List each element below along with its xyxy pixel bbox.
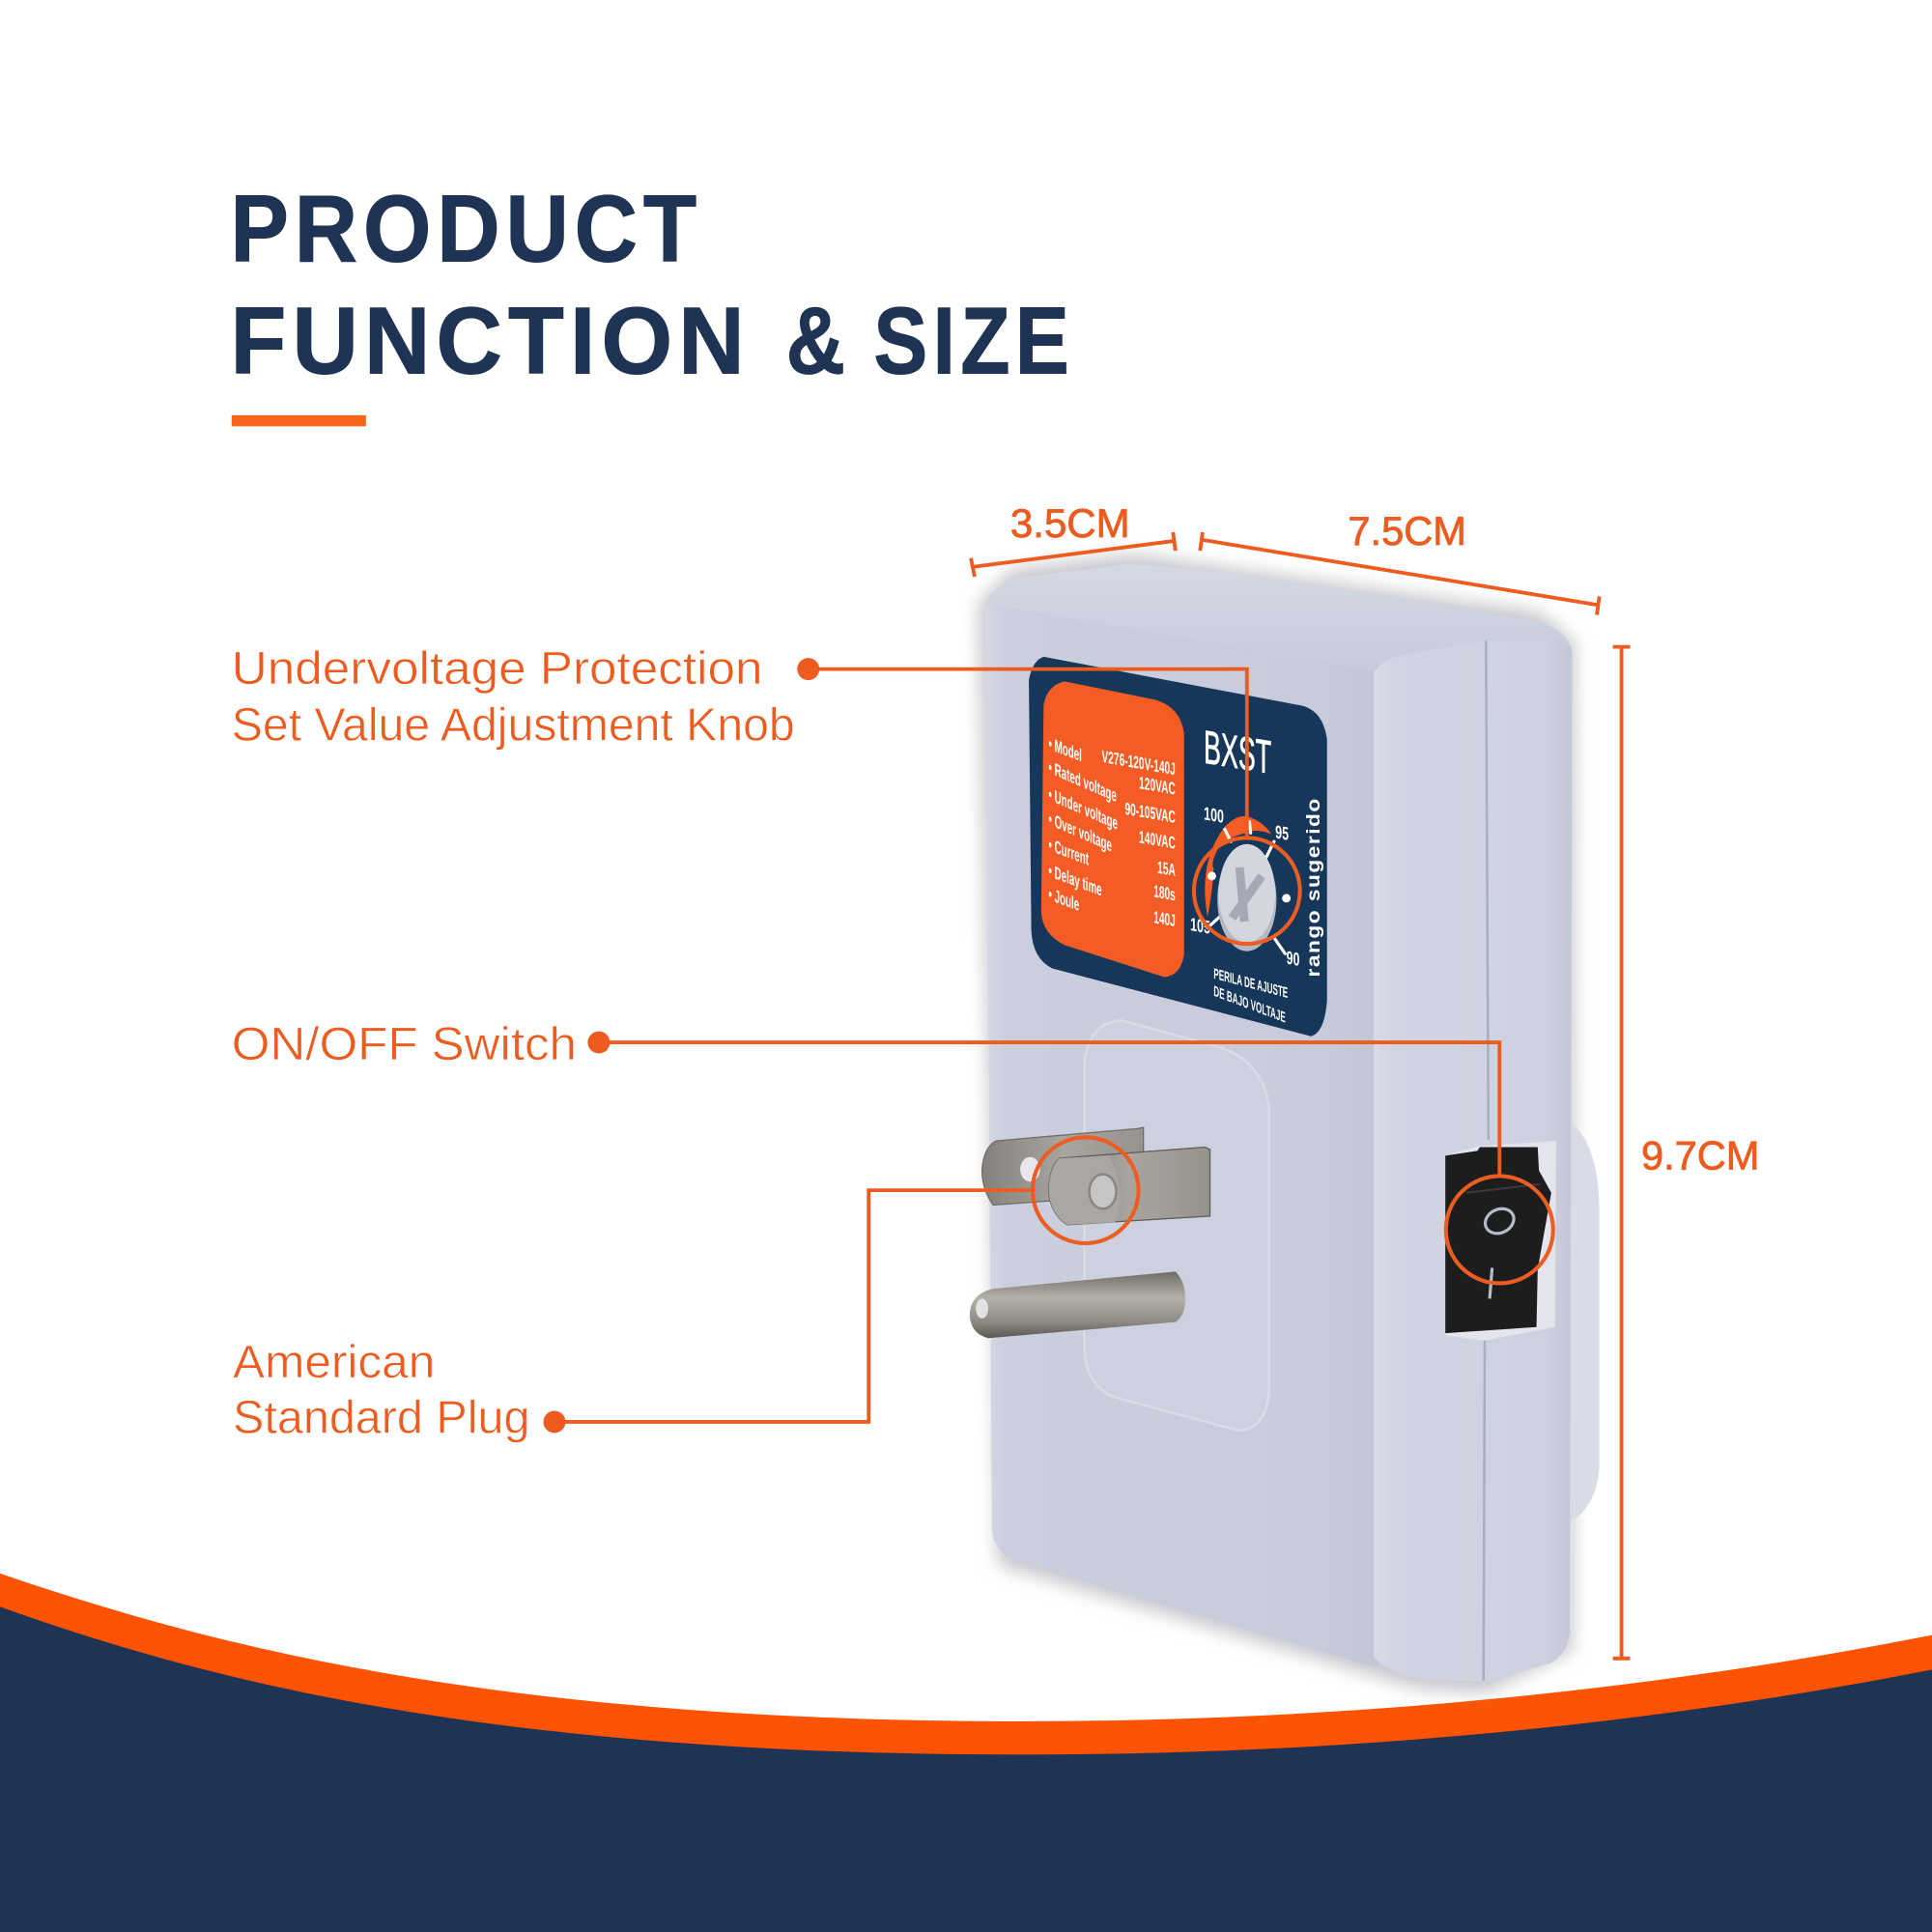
- spec list right: 180s: [1153, 883, 1176, 905]
- plug plate: [1084, 1020, 1269, 1431]
- dimension: 7.5CM: 7.5CM: [1348, 508, 1466, 554]
- rocker switch: [1445, 1148, 1551, 1333]
- dial numbers: 95: [1275, 822, 1289, 845]
- spec list right: V276-120V-140J: [1101, 748, 1176, 780]
- dial numbers: 100: [1204, 804, 1224, 828]
- label: navy panel: [1029, 657, 1327, 1037]
- front face: [985, 604, 1378, 1668]
- dial ticks: [1208, 822, 1285, 953]
- switch recess: [1445, 1141, 1556, 1341]
- callout: undervoltage knob: Set Value Adjustment Knob: [232, 699, 795, 752]
- callout: american plug: Standard Plug: [233, 1391, 529, 1443]
- dial numbers: [1190, 804, 1299, 971]
- dimension: 9.7CM: [1613, 647, 1759, 1659]
- spec list left: • Current: [1048, 835, 1089, 870]
- dial arc: [1205, 816, 1271, 917]
- callout: on/off switch: ON/OFF Switch: [232, 1018, 577, 1070]
- dimension: 9.7CM: 9.7CM: [1641, 1132, 1759, 1178]
- round ground pin: [970, 1271, 1185, 1338]
- dimension: 3.5CM: 3.5CM: [1010, 500, 1130, 546]
- callout: american plug: [233, 1190, 1035, 1443]
- title: FUNCTION: [231, 287, 751, 393]
- spec list left: [1048, 734, 1118, 916]
- dimension: 3.5CM: [971, 500, 1176, 577]
- spec list right: 140J: [1153, 909, 1176, 931]
- spec list left: • Under voltage: [1048, 784, 1118, 835]
- dial numbers: 105: [1190, 914, 1210, 939]
- back bump: [1555, 1115, 1600, 1525]
- callout: american plug: American: [233, 1336, 435, 1388]
- spec list left: • Model: [1048, 734, 1082, 766]
- spec list right: 120VAC: [1139, 774, 1176, 800]
- vertical text: rango sugerido: [1304, 797, 1324, 977]
- side face: [1374, 639, 1573, 1682]
- adjust knob caption: DE BAJO VOLTAJE: [1213, 982, 1286, 1026]
- spec list left: • Rated voltage: [1048, 757, 1117, 807]
- callout circle: plug: [1033, 1137, 1139, 1243]
- pin highlight: [976, 1298, 988, 1319]
- side seam: [1484, 640, 1489, 1681]
- rocker edge line: [1466, 1184, 1540, 1193]
- title underline: [232, 415, 366, 426]
- spec list left: • Joule: [1048, 884, 1079, 916]
- callout: undervoltage knob: Undervoltage Protection: [232, 642, 763, 695]
- bottom wave band: [0, 1574, 1932, 1932]
- device shadow: [979, 554, 1575, 1693]
- front blade tip: [1048, 1155, 1120, 1225]
- adjust knob caption: [1213, 965, 1288, 1026]
- top face: [985, 564, 1573, 671]
- dial numbers: 90: [1287, 948, 1299, 971]
- title: [231, 175, 1074, 393]
- spec list left: • Over voltage: [1048, 809, 1112, 857]
- callout circle: knob: [1194, 838, 1300, 944]
- spec list right: 15A: [1157, 859, 1176, 881]
- dimension: 7.5CM: [1200, 508, 1600, 614]
- title: PRODUCT: [231, 175, 702, 281]
- front blade hole: [1090, 1175, 1117, 1208]
- spec list right: 140VAC: [1139, 829, 1176, 854]
- back blade hole: [1020, 1157, 1040, 1181]
- brand logo: BXST: [1204, 721, 1271, 784]
- knob: [1217, 844, 1276, 952]
- label: orange spec panel: [1041, 681, 1184, 977]
- switch O mark: [1481, 1205, 1518, 1237]
- spec list right: 90-105VAC: [1124, 800, 1176, 828]
- spec list right: [1101, 748, 1176, 931]
- product: surge protector device: [970, 554, 1600, 1693]
- switch I mark: [1490, 1267, 1492, 1298]
- title: SIZE: [873, 287, 1074, 393]
- callout: undervoltage knob: [232, 642, 1247, 838]
- back blade: [982, 1127, 1144, 1205]
- spec list left: • Delay time: [1048, 861, 1102, 901]
- title: &: [786, 287, 845, 393]
- front blade: [1048, 1148, 1210, 1225]
- callout: on/off switch: [232, 1018, 1499, 1177]
- callout circle: switch: [1446, 1176, 1553, 1283]
- adjust knob caption: PERILA DE AJUSTE: [1213, 965, 1288, 1002]
